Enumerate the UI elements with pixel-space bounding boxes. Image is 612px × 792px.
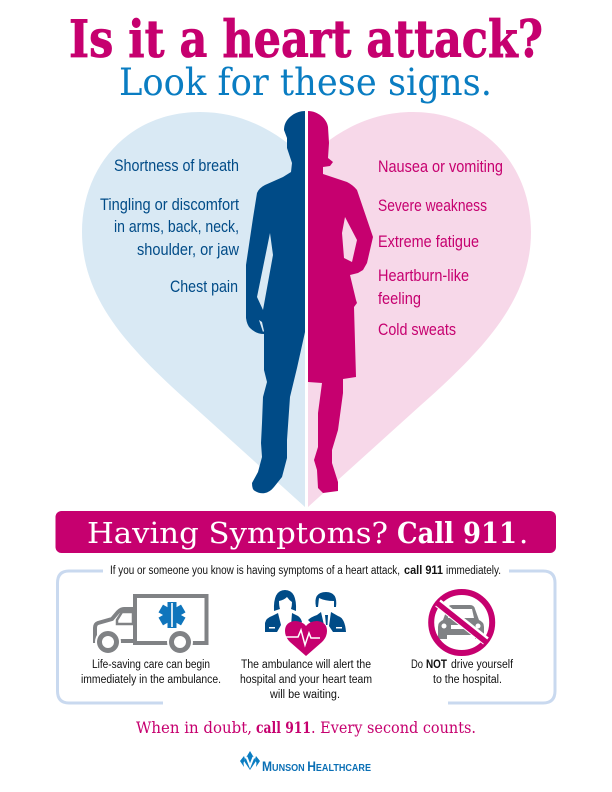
caption: heart team: The ambulance will alert the	[241, 659, 371, 671]
closing line: When in doubt,	[136, 719, 252, 737]
intro sentence: call 911	[404, 565, 444, 577]
female symptoms text: Cold sweats	[378, 320, 456, 339]
doctor: man	[308, 592, 346, 632]
intro sentence: If you or someone you know is having symptoms of a heart attack,	[110, 565, 400, 577]
caption: no driving	[411, 659, 514, 686]
icon: heart	[285, 621, 327, 656]
icon: ambulance	[95, 596, 206, 655]
banner: .	[519, 516, 528, 550]
closing line: . Every second counts.	[311, 719, 476, 737]
banner: Having Symptoms?	[87, 516, 388, 550]
closing line: call 911	[256, 718, 311, 737]
caption: no driving: Do	[411, 659, 423, 671]
caption: no driving: to the hospital.	[433, 674, 502, 686]
heart: right pink half	[308, 112, 531, 507]
info box outline	[58, 571, 555, 703]
male silhouette	[246, 111, 305, 493]
male symptoms text: in arms, back, neck,	[114, 217, 239, 236]
female symptoms text: Severe weakness	[378, 196, 487, 215]
female silhouette	[308, 111, 373, 493]
caption: no driving: NOT	[426, 659, 447, 671]
heart: left blue half	[82, 112, 305, 507]
caption: no driving: drive yourself	[451, 659, 514, 671]
female symptoms text: feeling	[378, 289, 421, 308]
banner	[56, 511, 556, 553]
female symptoms text: Heartburn-like	[378, 266, 469, 285]
male symptoms text: Tingling or discomfort	[100, 195, 239, 214]
caption: heart team	[240, 659, 372, 701]
subtitle: Look for these signs.	[119, 61, 492, 104]
caption: ambulance	[81, 659, 221, 686]
logo	[240, 751, 371, 774]
banner: Call 911	[397, 516, 517, 550]
male symptoms text: Chest pain	[170, 277, 238, 296]
male symptoms text: Shortness of breath	[114, 156, 239, 175]
caption: heart team: will be waiting.	[269, 689, 340, 701]
logo: MUNSON HEALTHCARE	[262, 758, 371, 774]
female symptoms text	[378, 157, 503, 339]
female symptoms text: Nausea or vomiting	[378, 157, 503, 176]
icon: star of life	[158, 602, 186, 628]
caption: ambulance: Life-saving care can begin	[92, 659, 210, 671]
intro sentence: immediately.	[446, 565, 501, 577]
male symptoms text	[100, 156, 240, 296]
icon: no driving	[431, 592, 492, 653]
caption: ambulance: immediately in the ambulance.	[81, 674, 221, 686]
doctor: woman	[265, 590, 302, 632]
caption: heart team: hospital and your heart team	[240, 674, 372, 686]
male symptoms text: shoulder, or jaw	[137, 240, 240, 259]
icon: heart team	[265, 590, 346, 656]
female symptoms text: Extreme fatigue	[378, 232, 479, 251]
